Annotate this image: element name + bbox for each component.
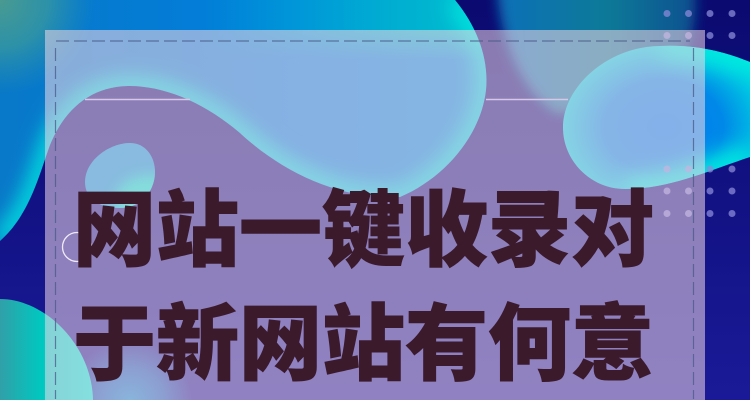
dashed frame [56, 41, 694, 399]
bottom left blob [0, 299, 93, 400]
dots pattern [664, 10, 736, 217]
white ring [62, 232, 92, 262]
bottom glow [68, 340, 192, 400]
title [73, 184, 654, 391]
right blob [560, 40, 750, 190]
light horizontal lines [85, 98, 568, 100]
title: 网站一键收录对 [73, 184, 654, 277]
title: 于新网站有何意 [73, 298, 654, 391]
small inner blob [85, 143, 155, 208]
top right soft blob [497, 0, 696, 113]
big top left blob [0, 0, 500, 250]
